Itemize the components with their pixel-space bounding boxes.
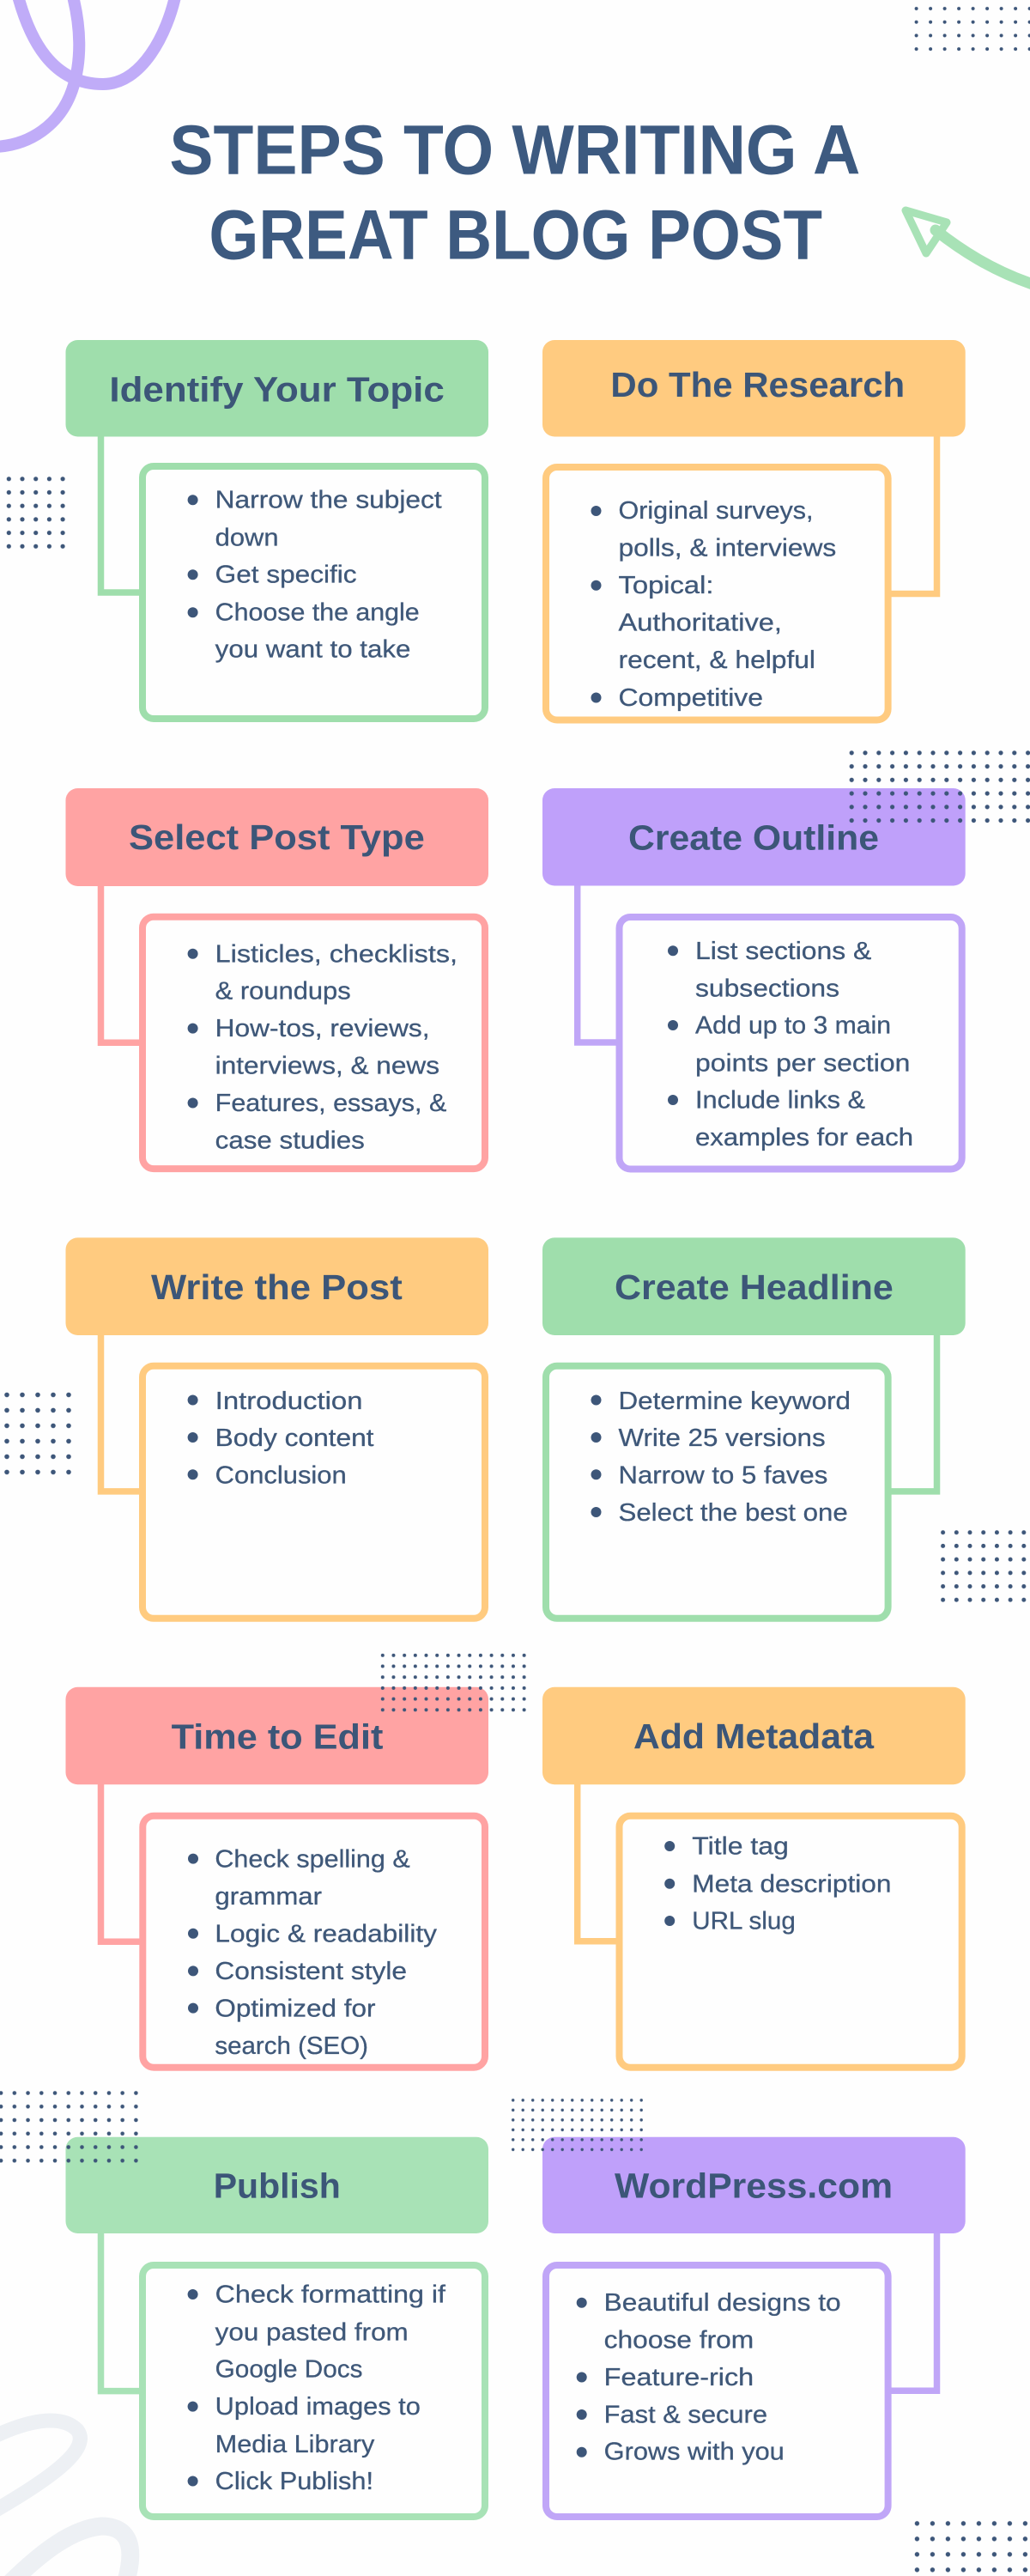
list box bbox=[546, 467, 888, 720]
list box: grammar bbox=[215, 1883, 322, 1911]
list box: subsections bbox=[695, 975, 839, 1002]
list box bbox=[620, 917, 962, 1170]
list box: Google Docs bbox=[215, 2356, 362, 2384]
decoration: grey swirl bottom left bbox=[0, 2421, 130, 2576]
list box bbox=[142, 466, 485, 719]
heading: Time to Edit bbox=[172, 1716, 384, 1756]
connector bbox=[101, 1334, 142, 1492]
list box: Grows with you bbox=[604, 2439, 785, 2466]
list box: URL slug bbox=[692, 1908, 796, 1935]
decoration: dot grid bottom right bbox=[909, 2516, 1030, 2576]
list box: recent, & helpful bbox=[618, 647, 815, 674]
list box: Title tag bbox=[692, 1833, 789, 1861]
list box: Logic & readability bbox=[215, 1920, 438, 1947]
heading: Create Outline bbox=[628, 817, 879, 857]
list box: Get specific bbox=[215, 561, 357, 588]
panel: Publish bbox=[65, 2137, 488, 2517]
heading bbox=[542, 340, 966, 436]
heading: Add Metadata bbox=[633, 1716, 875, 1756]
list box: & roundups bbox=[215, 978, 351, 1005]
list box: interviews, & news bbox=[215, 1052, 439, 1079]
heading: Write the Post bbox=[151, 1267, 403, 1307]
connector bbox=[578, 1783, 620, 1941]
list box: Narrow the subject bbox=[215, 487, 442, 514]
list box: Include links & bbox=[695, 1087, 865, 1115]
list box: points per section bbox=[695, 1049, 910, 1077]
list box: Narrow to 5 faves bbox=[618, 1462, 827, 1490]
list box: examples for each bbox=[695, 1124, 913, 1151]
heading: Select Post Type bbox=[129, 817, 425, 857]
list box: Beautiful designs to bbox=[604, 2289, 841, 2317]
list box: Write 25 versions bbox=[618, 1425, 826, 1452]
list box bbox=[142, 2265, 485, 2517]
decoration: purple swirl top left bbox=[0, 0, 176, 147]
panel: Write the Post bbox=[65, 1237, 488, 1619]
heading bbox=[542, 1687, 966, 1784]
list box: Check formatting if bbox=[215, 2281, 446, 2309]
heading: WordPress.com bbox=[615, 2166, 893, 2206]
list box bbox=[142, 917, 485, 1169]
title bbox=[169, 111, 860, 275]
panel: Create Headline bbox=[542, 1237, 966, 1619]
connector bbox=[101, 885, 142, 1042]
list box: choose from bbox=[604, 2327, 754, 2354]
connector bbox=[888, 436, 937, 594]
connector bbox=[578, 885, 620, 1042]
list box: Feature-rich bbox=[604, 2364, 754, 2391]
list box: Fast & secure bbox=[604, 2401, 767, 2428]
list box: Select the best one bbox=[618, 1499, 848, 1527]
list box bbox=[546, 1366, 888, 1619]
list box: Features, essays, & bbox=[215, 1090, 446, 1117]
heading: Identify Your Topic bbox=[109, 370, 445, 410]
decoration: dot grid top right bbox=[910, 2, 1030, 56]
list box: Original surveys, bbox=[618, 497, 814, 525]
connector bbox=[888, 2233, 937, 2391]
panel: Time to Edit bbox=[65, 1687, 488, 2068]
decoration: dot grid right of row 3 bbox=[936, 1526, 1030, 1607]
list box bbox=[546, 2265, 888, 2517]
list box: Meta description bbox=[692, 1870, 891, 1898]
list box: How-tos, reviews, bbox=[215, 1015, 429, 1042]
list box: polls, & interviews bbox=[618, 534, 836, 562]
connector bbox=[888, 1334, 937, 1492]
decoration: dot grid over WordPress.com bbox=[508, 2095, 646, 2154]
list box: Authoritative, bbox=[618, 610, 782, 637]
decoration: dot grid left of row 1 bbox=[3, 472, 70, 553]
list box: Listicles, checklists, bbox=[215, 940, 457, 968]
panel: Create Outline bbox=[542, 788, 966, 1170]
list box: Consistent style bbox=[215, 1958, 407, 1985]
list box: Click Publish! bbox=[215, 2468, 373, 2495]
list box bbox=[620, 1816, 962, 2068]
heading bbox=[65, 1687, 488, 1784]
list box: down bbox=[215, 525, 278, 552]
list box: Check spelling & bbox=[215, 1845, 410, 1873]
panel: Identify Your Topic bbox=[65, 340, 488, 719]
list box: search (SEO) bbox=[215, 2032, 368, 2060]
panel: WordPress.com bbox=[542, 2137, 966, 2517]
decoration: dot grid over Time to Edit bbox=[378, 1650, 530, 1716]
list box: List sections & bbox=[695, 938, 871, 965]
list box: case studies bbox=[215, 1127, 365, 1154]
list box: Competitive bbox=[618, 684, 763, 712]
list box: Add up to 3 main bbox=[695, 1012, 891, 1040]
panel: Do The Research bbox=[542, 340, 966, 720]
list box: Choose the angle bbox=[215, 598, 420, 626]
panel: Select Post Type bbox=[65, 788, 488, 1169]
heading bbox=[542, 788, 966, 886]
list box: Body content bbox=[215, 1425, 374, 1452]
list box: Topical: bbox=[618, 572, 714, 599]
list box: Conclusion bbox=[215, 1462, 347, 1490]
list box: Optimized for bbox=[215, 1996, 376, 2023]
list box: you pasted from bbox=[215, 2318, 409, 2346]
heading bbox=[542, 2137, 966, 2233]
heading bbox=[65, 788, 488, 886]
connector bbox=[101, 436, 142, 592]
heading: Do The Research bbox=[610, 365, 905, 404]
list box: Media Library bbox=[215, 2431, 375, 2458]
heading bbox=[65, 1237, 488, 1335]
decoration: dot grid over Create Outline bbox=[845, 746, 1030, 828]
decoration: dot grid left of row 3 bbox=[0, 1387, 76, 1479]
decoration: dot grid over Publish bbox=[0, 2087, 142, 2167]
list box: Introduction bbox=[215, 1388, 362, 1415]
list box: you want to take bbox=[215, 636, 410, 664]
heading bbox=[65, 340, 488, 436]
heading: Create Headline bbox=[615, 1267, 894, 1307]
connector bbox=[101, 1783, 142, 1941]
list box: Upload images to bbox=[215, 2393, 421, 2421]
list box bbox=[142, 1816, 485, 2068]
title: GREAT BLOG POST bbox=[209, 197, 822, 275]
list box bbox=[142, 1366, 485, 1619]
title: STEPS TO WRITING A bbox=[169, 111, 860, 189]
heading bbox=[65, 2137, 488, 2233]
connector bbox=[101, 2233, 142, 2391]
heading bbox=[542, 1237, 966, 1335]
panel: Add Metadata bbox=[542, 1687, 966, 2068]
list box: Determine keyword bbox=[618, 1388, 851, 1415]
icon: green arrow bbox=[906, 210, 1030, 285]
heading: Publish bbox=[214, 2166, 341, 2206]
